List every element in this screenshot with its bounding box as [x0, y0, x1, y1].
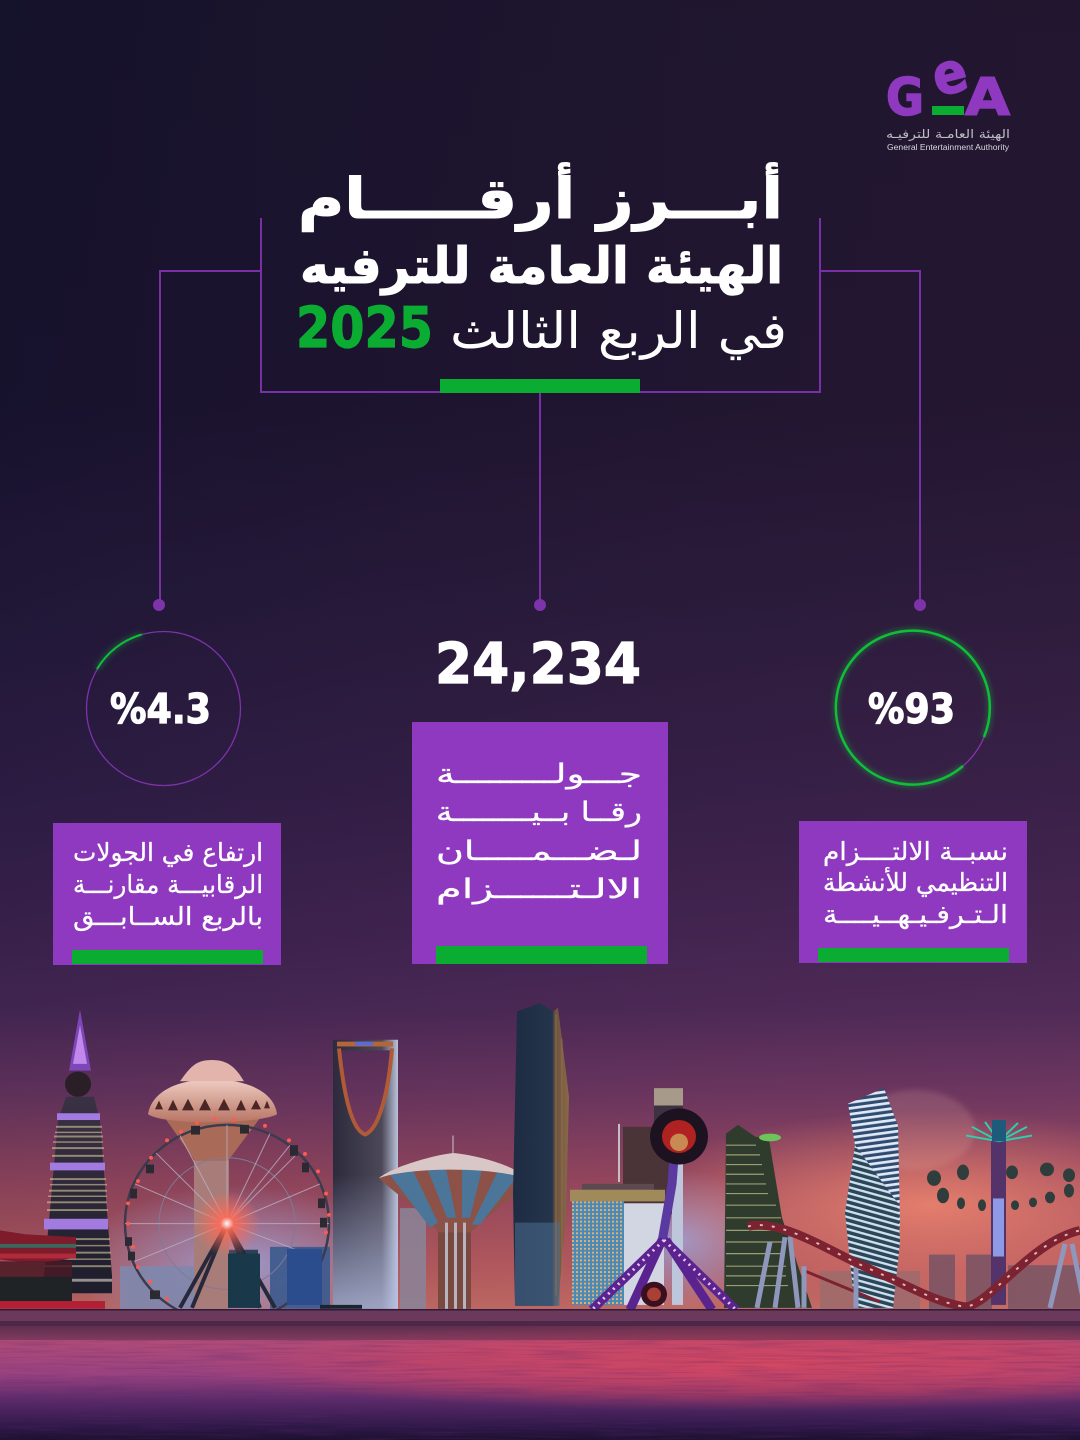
- title green accent bar: [440, 379, 640, 393]
- stat right: ring 93%: [836, 630, 990, 785]
- panel left text: ارتفاع في الجولات: [73, 838, 263, 867]
- panel centre text: لـضـــمـــــان: [436, 836, 642, 867]
- striped water tower: [379, 1136, 529, 1309]
- logo mark: [886, 39, 1010, 128]
- water and promenade: [0, 1309, 1080, 1440]
- panel centre: [412, 722, 668, 964]
- connector dot right: [914, 599, 926, 611]
- drop tower ride: [592, 1108, 736, 1310]
- title: [296, 162, 787, 361]
- stat centre: value: 24,234: [435, 632, 641, 697]
- connector dot left: [153, 599, 165, 611]
- panel left text: [73, 838, 263, 932]
- roller coaster: [748, 1225, 1080, 1308]
- panel left: [53, 823, 281, 965]
- logo mark: e: [925, 39, 974, 110]
- panel centre green bar: [436, 946, 647, 964]
- panel right text: الـتـرفـيـهــيــــة: [823, 900, 1008, 930]
- panel left text: بالربع الســابـــق: [73, 902, 263, 932]
- title line 1: أبـــرز أرقـــــام: [298, 162, 783, 232]
- title frame and connectors: [160, 218, 920, 605]
- panel right text: التنظيمي للأنشطة: [823, 866, 1008, 897]
- swing tower ride: [927, 1120, 1075, 1305]
- central towers cluster: [570, 1088, 683, 1305]
- distant buildings: [120, 1208, 1080, 1309]
- Al Faisaliah tower: [44, 1010, 112, 1293]
- panel centre text: جـــولـــــــــة: [436, 759, 642, 790]
- skyline illustration: [0, 1003, 1080, 1322]
- mushroom water tower: [148, 1060, 277, 1309]
- twisted tower: [845, 1088, 900, 1308]
- logo mark: G: [886, 68, 924, 128]
- panel right text: نسبــة الالتــــزام: [823, 837, 1008, 866]
- panel centre text: الالـتــــــزام: [436, 874, 642, 905]
- panel left text: الرقابيـــة مقارنـــة: [73, 870, 263, 899]
- stat left: ring 4.3%: [86, 632, 240, 786]
- small fairground structures: [228, 1249, 362, 1309]
- value: %4.3: [110, 685, 211, 733]
- panel centre text: رقــا بــيــــــــة: [436, 797, 642, 828]
- panel right: [799, 821, 1027, 963]
- Kingdom Tower: [333, 1040, 398, 1309]
- title line 3: في الربع الثالث: [450, 302, 787, 361]
- panel right text: [823, 837, 1008, 930]
- logo English name: General Entertainment Authority: [887, 142, 1010, 152]
- title year: 2025: [296, 296, 433, 361]
- logo Arabic name: الهيئة العامـة للترفيـه: [886, 127, 1010, 142]
- carousel: [0, 1230, 105, 1309]
- green tower: [724, 1125, 812, 1308]
- title line 2: الهيئة العامة للترفيه: [300, 237, 783, 296]
- logo mark: A: [965, 68, 1010, 128]
- connector dot centre: [534, 599, 546, 611]
- value: %93: [868, 685, 955, 733]
- logo: General Entertainment Authority: [886, 39, 1010, 152]
- panel left green bar: [72, 950, 263, 964]
- ferris wheel: [125, 1117, 331, 1322]
- KAFD tower: [513, 1003, 569, 1306]
- panel right green bar: [818, 948, 1009, 962]
- panel centre text: [436, 759, 642, 905]
